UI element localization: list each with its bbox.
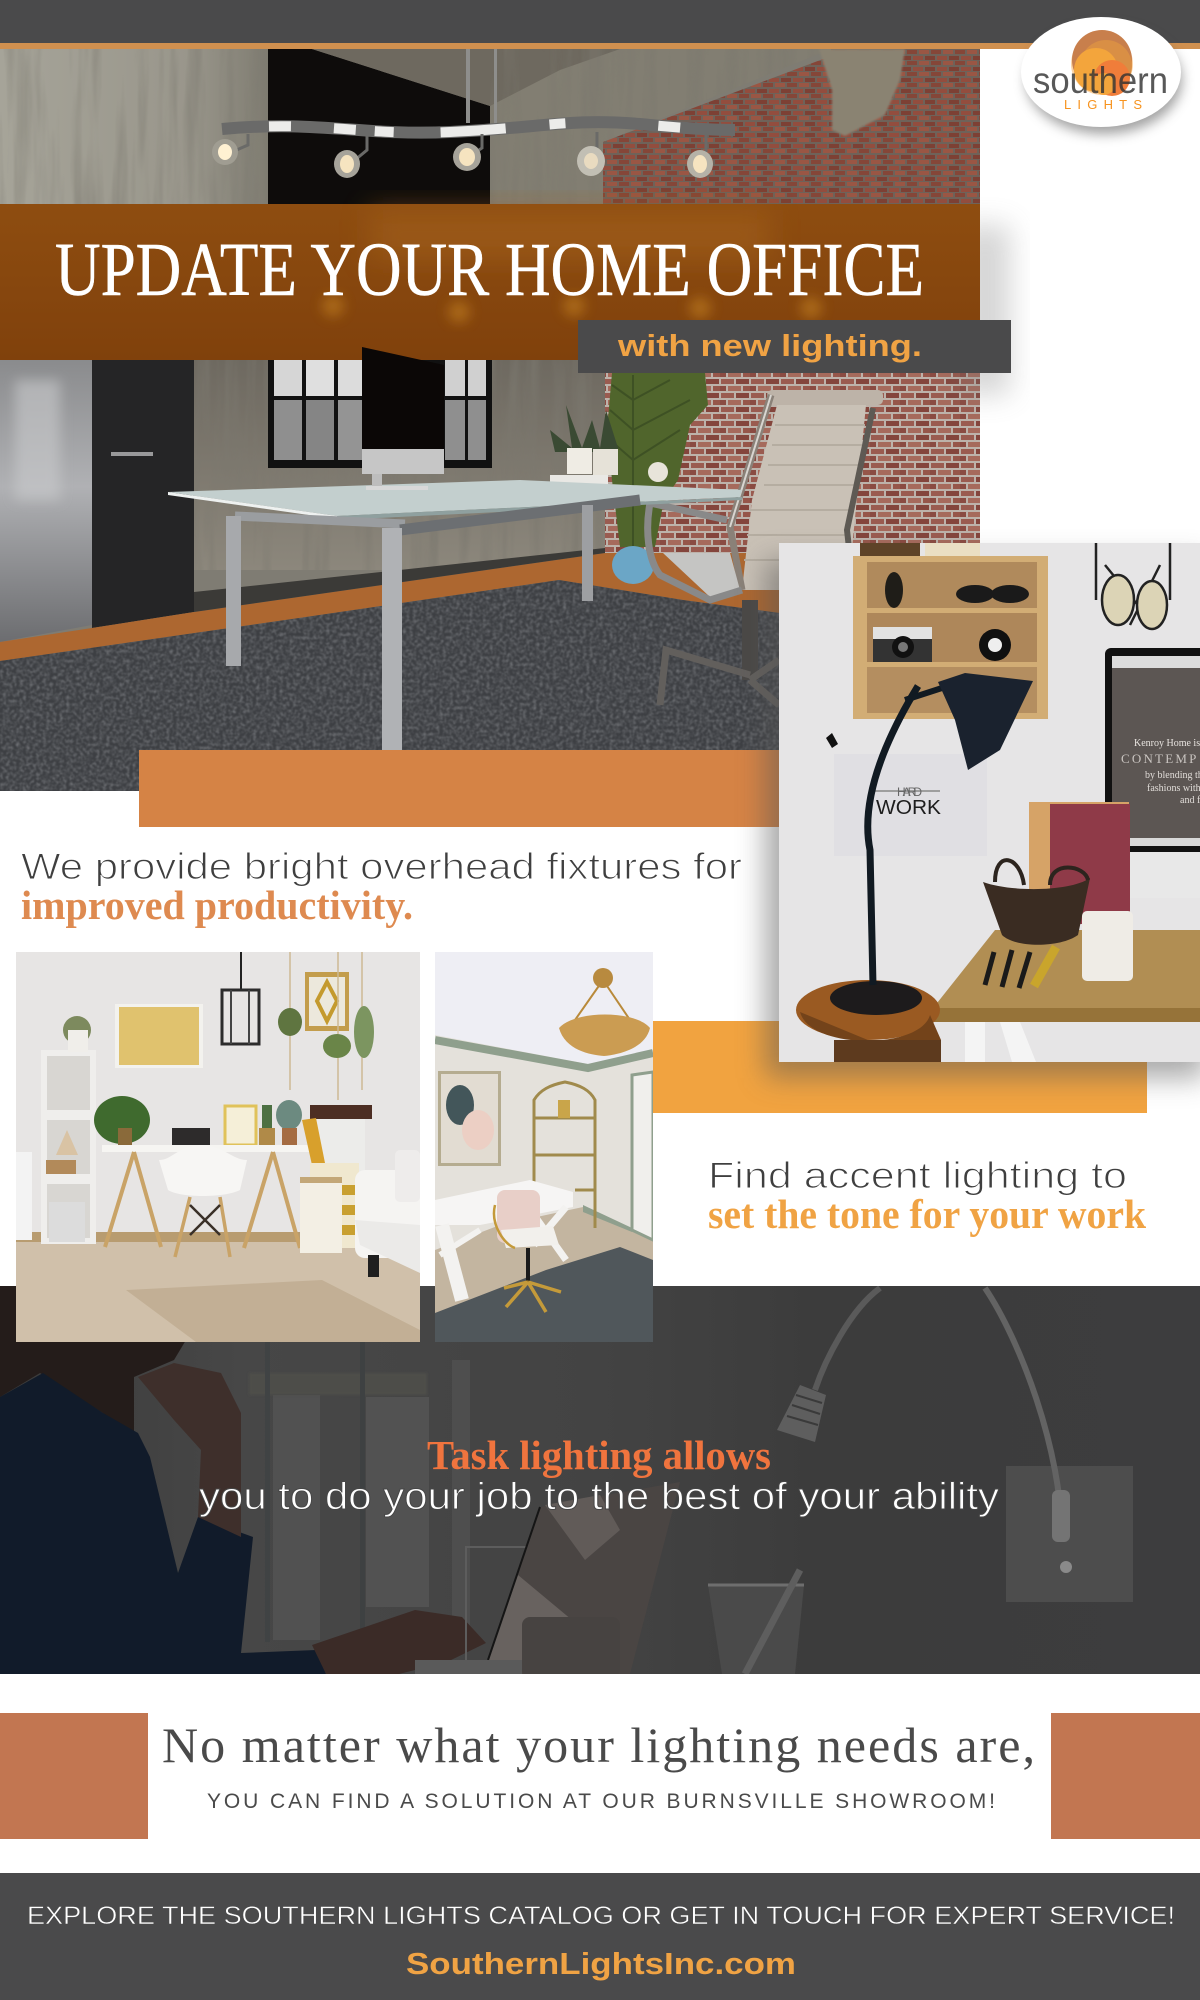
callout: showroom: No matter what your lighting needs are,: [162, 1717, 1037, 1773]
header bar: [0, 0, 1200, 49]
monitor screen: CONTEMP: [1121, 751, 1199, 766]
title text: UPDATE YOUR HOME OFFICE: [55, 228, 924, 312]
white chair: [159, 1145, 247, 1257]
mug: [522, 1617, 620, 1677]
wall shelf: [853, 556, 1048, 719]
text: accent lighting: [708, 1155, 1146, 1237]
yellow art: [115, 1004, 203, 1068]
white board: [16, 1152, 32, 1240]
lower concrete wall: [194, 360, 614, 570]
wall lamp: [777, 1288, 1133, 1602]
text: overhead fixtures: improved productivity.: [21, 882, 413, 928]
door: [632, 1072, 653, 1240]
chandelier: [559, 968, 650, 1056]
items on shelf top: [860, 543, 980, 556]
amber accent bar: [653, 1021, 1147, 1113]
photo: loft office with track light: [0, 49, 980, 791]
title band shadow: [960, 225, 1010, 395]
upper concrete corner: [490, 49, 831, 210]
spot lamps: [212, 132, 713, 178]
title band: [0, 204, 980, 360]
logo: LIGHTS: [1064, 97, 1142, 112]
white crates: [41, 1016, 96, 1244]
baseboard: [583, 1205, 632, 1232]
floor: [16, 1242, 420, 1342]
gold chair: [494, 1190, 561, 1312]
pens: [985, 947, 1056, 988]
upper concrete wall: [0, 49, 245, 204]
footer: [0, 1873, 1200, 2000]
monitor: [362, 347, 444, 490]
jute rug: [126, 1280, 420, 1342]
band soft lights: [322, 210, 822, 323]
notebook: [1029, 802, 1130, 924]
table: [938, 930, 1200, 1008]
rug: [435, 1247, 653, 1342]
text: accent lighting: set the tone for your work: [708, 1191, 1146, 1237]
stool: [796, 980, 941, 1062]
poster: HARD: [897, 785, 922, 799]
glass desk: [168, 480, 742, 750]
lower brick wall: [605, 373, 980, 553]
mug: [1082, 911, 1133, 981]
upper black panel: [268, 49, 490, 210]
desk plants: [94, 1096, 302, 1146]
window light: [273, 1360, 470, 1640]
window: [268, 360, 492, 468]
rug: [0, 580, 779, 791]
fern plant: [607, 373, 708, 547]
ceiling: [435, 952, 653, 1064]
blue pot: [612, 546, 654, 584]
small potted plants: [550, 405, 668, 488]
panel: task lighting dark photo: [0, 1286, 1200, 1677]
gold shelf: [534, 1082, 595, 1228]
monitor screen: [1105, 648, 1200, 852]
gold frame: [305, 972, 349, 1031]
woman: [0, 1286, 486, 1674]
typing hand: [312, 1610, 486, 1674]
poster: [826, 733, 941, 814]
footer: SouthernLightsInc.com: [406, 1946, 796, 1981]
logo: [1021, 17, 1182, 134]
task text: you to do your job to the best of your ability: [199, 1476, 999, 1518]
wire basket: [708, 1570, 804, 1674]
task text: Task lighting allows: [427, 1432, 771, 1478]
navy blouse: [0, 1373, 326, 1674]
glass panel: [0, 360, 92, 642]
text: accent lighting: Find accent lighting to: [708, 1155, 1127, 1196]
text: overhead fixtures: We provide bright overhead fixtures for: [21, 846, 742, 887]
track light bar: [222, 122, 735, 133]
photo shadow: [765, 560, 1200, 1078]
white desk: [435, 1180, 573, 1300]
gold rolls and bags: [300, 1118, 359, 1253]
raised hand: [138, 1363, 241, 1537]
logo sun: [1071, 30, 1133, 96]
monitor screen: Kenroy Home is: [1134, 738, 1200, 749]
headphones: [1096, 543, 1170, 629]
office chair: [648, 390, 883, 705]
black door: [92, 360, 194, 628]
hanging plants: [278, 952, 374, 1100]
abstract art: [438, 1071, 501, 1166]
ceiling rods: [466, 49, 497, 123]
poster: WORK: [876, 797, 942, 819]
moulding: [435, 1040, 653, 1068]
floor: [435, 1207, 653, 1342]
photo: desk with black lamp: [779, 543, 1200, 1062]
orange accent bar: [139, 750, 784, 827]
logo: southern: [1033, 60, 1168, 101]
subtitle box: [578, 320, 1011, 373]
white armchair: [355, 1150, 420, 1277]
laptop: [415, 1482, 680, 1674]
upper brick wall: [603, 49, 980, 210]
task text: [199, 1432, 999, 1518]
subtitle box: with new lighting.: [617, 328, 922, 363]
glass on desk: [466, 1547, 526, 1660]
bucket: [983, 860, 1090, 945]
hair: [0, 1286, 185, 1430]
wood floor: [0, 553, 779, 661]
callout: showroom: [0, 1713, 1200, 1839]
text: overhead fixtures: [21, 846, 742, 928]
concrete patch: [819, 49, 905, 136]
photo: white bright workspace: [16, 952, 420, 1342]
desk: [102, 1145, 310, 1248]
pendant light: [222, 952, 259, 1044]
callout: showroom: YOU CAN FIND A SOLUTION AT OUR BURNSVILLE SHOWROOM!: [207, 1790, 995, 1813]
footer: EXPLORE THE SOUTHERN LIGHTS CATALOG OR GET IN TOUCH FOR EXPERT SERVICE!: [27, 1902, 1175, 1930]
crate right: [310, 1105, 372, 1189]
photo: gold chandelier room: [435, 952, 653, 1342]
desk lamp: [830, 673, 1033, 1015]
